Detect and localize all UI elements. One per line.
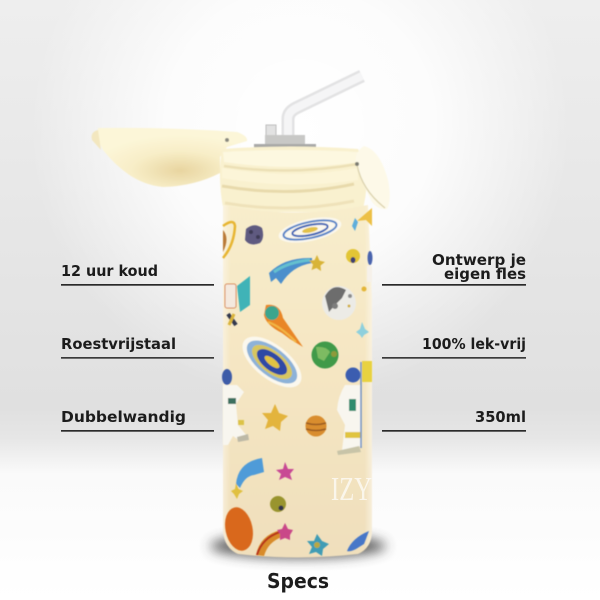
olive asteroid [270, 496, 286, 512]
shooting star [269, 255, 325, 284]
lid hinge strap [355, 146, 390, 209]
big orange planet [221, 505, 257, 553]
bottle collar [220, 146, 367, 212]
spec: Roestvrijstaal: Roestvrijstaal [61, 335, 176, 353]
orange planet [306, 416, 326, 436]
moon [322, 286, 356, 320]
spec: Ontwerp je eigen fles: Ontwerp je [432, 251, 526, 269]
straw [288, 76, 362, 140]
pink star [276, 462, 294, 480]
green planet [312, 342, 338, 368]
bottle [92, 76, 390, 558]
top right yellow star fragment [357, 208, 372, 226]
rainbow comet [256, 523, 293, 556]
saturn [223, 222, 235, 258]
blue comet with yellow star [231, 458, 264, 499]
right astronaut [337, 361, 372, 455]
bottle body [223, 205, 372, 558]
left astronaut [222, 369, 249, 445]
space artwork [221, 208, 372, 556]
bottle shadow [210, 534, 386, 558]
spec: Ontwerp je eigen fles [382, 251, 526, 286]
spec: 100% lek-vrij: 100% lek-vrij [422, 335, 526, 353]
teal star [307, 534, 329, 556]
spec: 12 uur koud: 12 uur koud [61, 262, 158, 280]
gold star [262, 404, 288, 431]
asteroid [245, 225, 263, 244]
lower right comet [347, 531, 369, 551]
fire comet [264, 305, 303, 347]
caption: Specs: Specs [267, 569, 329, 593]
spec: Ontwerp je eigen fles: eigen fles [444, 265, 526, 283]
galaxy top [276, 213, 344, 247]
spec: Dubbelwandig: Dubbelwandig [61, 408, 186, 426]
metal valve [254, 125, 316, 149]
brand logo: IZY [331, 471, 372, 508]
galaxy swirl [234, 327, 310, 397]
satellite [225, 276, 250, 325]
open lid [92, 128, 247, 187]
small blue star [356, 322, 369, 338]
blue sparkle [352, 218, 358, 231]
spec: 350ml: 350ml [475, 408, 526, 426]
yellow planet [346, 249, 360, 263]
rocket [362, 251, 372, 292]
